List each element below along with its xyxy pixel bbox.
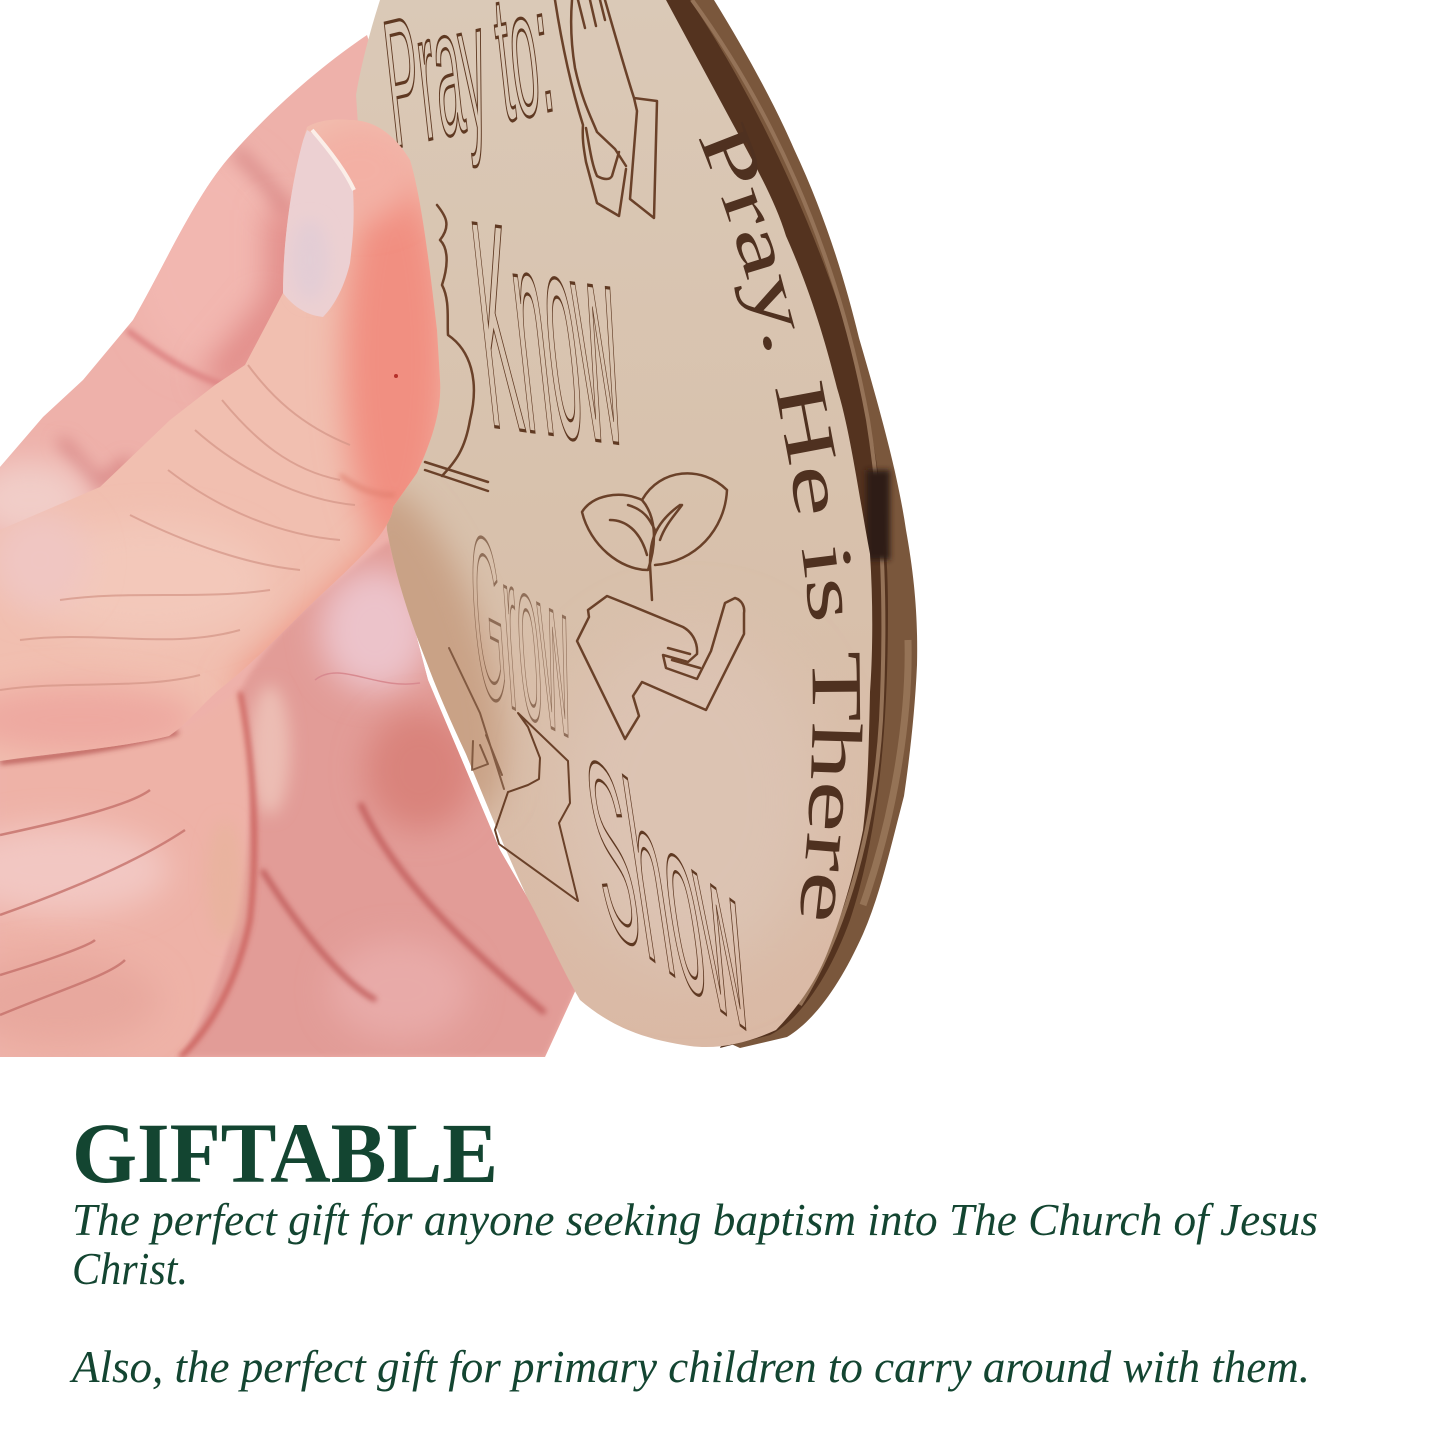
icon: praying hands <box>555 0 657 218</box>
engraved text: Grow: Grow <box>464 484 578 789</box>
red mark on thumb <box>394 374 398 378</box>
body text: The perfect gift for anyone seeking baptism into The Church of Jesus <box>72 1194 1318 1245</box>
curved band text: Pray. He is There <box>698 134 863 919</box>
palm and lower fingers <box>180 540 578 1057</box>
body text: Also, the perfect gift for primary children to carry around with them. <box>69 1341 1310 1392</box>
engraved text: Know: Know <box>461 159 634 508</box>
icon: seedling in hand <box>577 473 744 739</box>
heading: GIFTABLE: GIFTABLE <box>72 1105 498 1201</box>
engraved text: Show: Show <box>572 697 763 1090</box>
thumbnail <box>283 130 354 317</box>
image: hand holding disc <box>0 0 918 1090</box>
body text: Christ. <box>72 1243 188 1294</box>
icon: cup and scripture behind thumb <box>425 205 488 491</box>
body text <box>69 1194 1318 1392</box>
back of fingers <box>138 160 227 310</box>
palm creases <box>180 692 254 1057</box>
thumb <box>0 100 460 780</box>
wood disc edge <box>660 0 917 1048</box>
thumb pad shading <box>343 170 447 550</box>
disc face <box>356 0 872 1090</box>
white caption panel <box>0 1057 1445 1445</box>
icon: faded mark <box>449 648 504 789</box>
icon: reaching hand <box>495 713 578 901</box>
hand <box>0 35 575 1057</box>
knuckle wrinkles <box>0 365 355 690</box>
